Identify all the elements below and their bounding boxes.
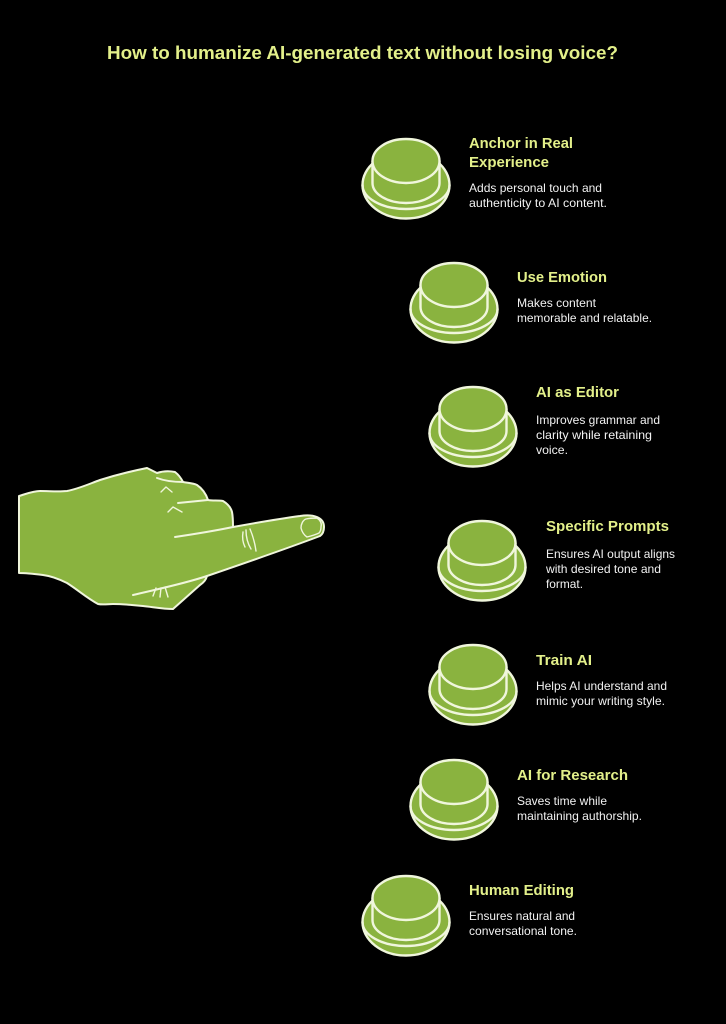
text: Editor description — [536, 413, 660, 457]
text: Editor description: Improves grammar and — [536, 413, 660, 427]
heading: Anchor in Real Experience: Experience — [469, 154, 549, 171]
icon: button 1 — [362, 139, 450, 218]
text: Train description: Helps AI understand and — [536, 679, 667, 693]
text: Emotion description — [517, 296, 652, 325]
heading: AI for Research: AI for Research — [517, 767, 628, 784]
text: Research description: maintaining authorship. — [517, 809, 642, 823]
text: Prompts description: format. — [546, 577, 583, 591]
text: Train description — [536, 679, 667, 708]
text: Research description: Saves time while — [517, 794, 607, 808]
text: Research description — [517, 794, 642, 823]
text: Prompts description: with desired tone and — [545, 562, 661, 576]
icon: button 3 — [430, 387, 516, 466]
step: AI for Research — [410, 760, 642, 840]
text: Editor description: voice. — [536, 443, 568, 457]
icon: button 4 — [438, 521, 526, 600]
heading: AI as Editor: AI as Editor — [536, 384, 619, 401]
text: Anchor description: authenticity to AI content. — [469, 196, 607, 210]
heading: Anchor in Real Experience — [469, 135, 573, 171]
step: Use Emotion — [410, 263, 652, 342]
text: Emotion description: memorable and relatable. — [517, 311, 652, 325]
step: Human Editing — [362, 876, 577, 956]
text: Prompts description — [545, 547, 675, 591]
icon: button 6 — [410, 760, 498, 840]
text: Human Editing description: Ensures natural and — [469, 909, 575, 923]
heading: Human Editing: Human Editing — [469, 882, 574, 899]
heading: Train AI: Train AI — [536, 652, 592, 669]
step: Specific Prompts — [438, 518, 675, 600]
text: Train description: mimic your writing style. — [536, 694, 665, 708]
icon: button 7 — [362, 876, 450, 956]
heading: Specific Prompts: Specific Prompts — [546, 518, 669, 535]
text: Human Editing description — [469, 909, 577, 938]
text: Emotion description: Makes content — [517, 296, 597, 310]
icon: button 5 — [430, 645, 516, 724]
text: Human Editing description: conversational tone. — [469, 924, 577, 938]
text: Anchor description: Adds personal touch and — [469, 181, 602, 195]
heading: Use Emotion: Use Emotion — [517, 269, 607, 286]
icon: pointing hand — [19, 468, 324, 609]
icon: button 2 — [410, 263, 498, 342]
title: How to humanize AI-generated text without losing voice? — [107, 42, 618, 63]
text: Prompts description: Ensures AI output aligns — [546, 547, 675, 561]
heading: Anchor in Real Experience: Anchor in Real — [469, 135, 573, 152]
text: Editor description: clarity while retaining — [536, 428, 652, 442]
step: Train AI — [430, 645, 667, 724]
text: Anchor description — [469, 181, 607, 210]
step: Anchor in Real Experience — [362, 135, 607, 218]
step: AI as Editor — [430, 384, 660, 466]
